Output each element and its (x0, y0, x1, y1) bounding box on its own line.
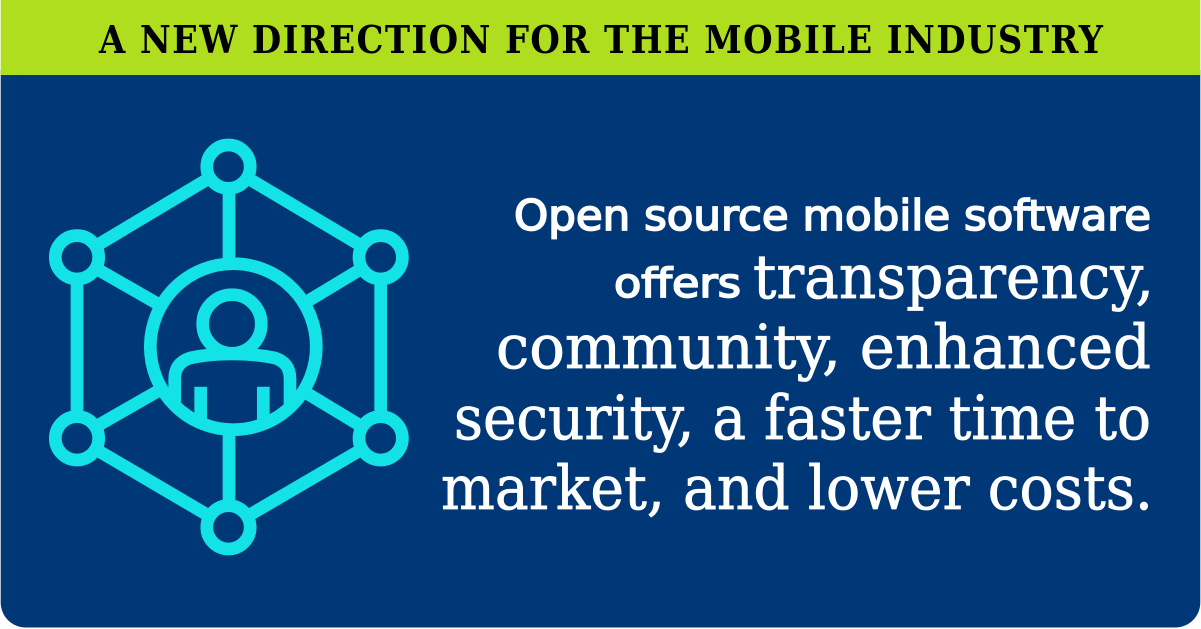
text line 2: transparency, (753, 242, 1154, 313)
icon: person head (203, 295, 261, 353)
text line 5: market, and lower costs. (441, 453, 1153, 524)
icon: hexagon links (77, 167, 381, 527)
icon: outer nodes (55, 145, 402, 549)
text line 1: Open source mobile software (514, 191, 1151, 240)
icon: person arms (201, 387, 263, 420)
text line 4: security, a faster time to (454, 383, 1151, 454)
text line 2 lead: offers (614, 261, 741, 307)
header band (1, 0, 1200, 75)
icon: network of people (55, 145, 402, 549)
icon: person body (175, 354, 290, 406)
title: A NEW DIRECTION FOR THE MOBILE INDUSTRY (98, 18, 1104, 63)
icon: central circle (150, 264, 316, 430)
text line 3: community, enhanced (496, 312, 1151, 383)
icon: spokes (97, 188, 361, 506)
text block: main statement (441, 191, 1154, 524)
